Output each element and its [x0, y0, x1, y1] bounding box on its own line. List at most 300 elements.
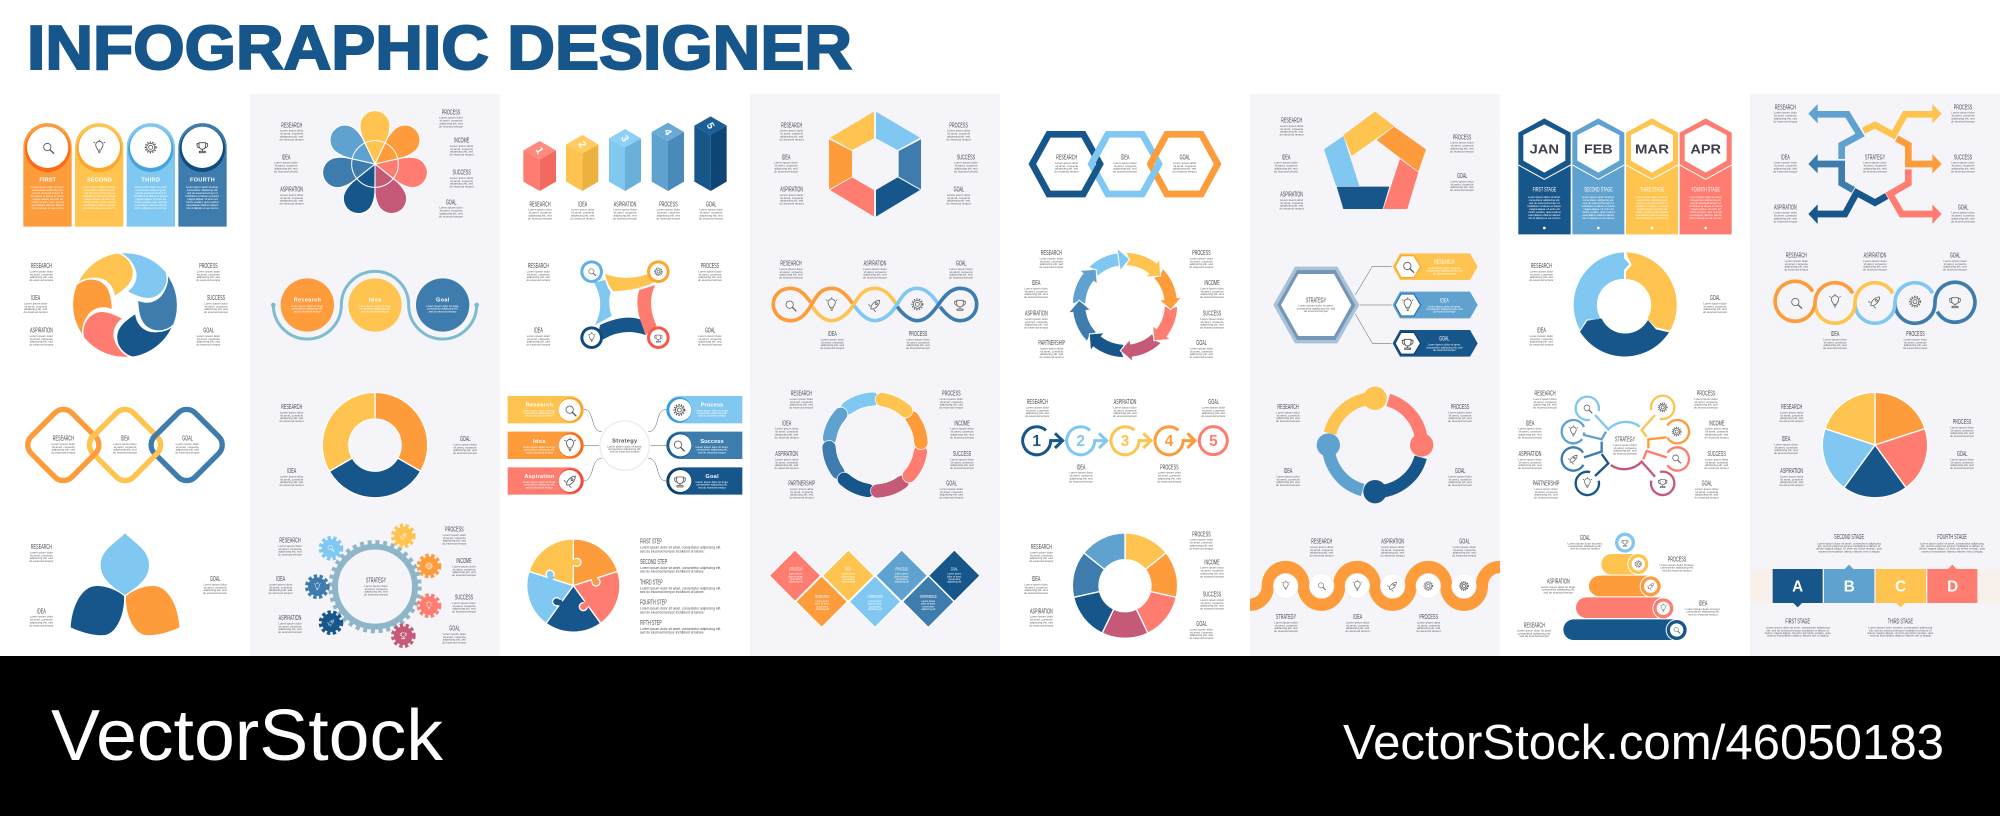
panel: segmented ring: Lorem ipsum dolor	[790, 487, 813, 491]
panel: strategy gears: do eiusmod tempor	[442, 542, 466, 546]
panel: hexagon ring: do eiusmod tempor	[947, 202, 971, 206]
panel: seven-part donut: RESEARCH	[1031, 544, 1052, 552]
panel: circular arrows: adipiscing elit, sed	[1040, 352, 1064, 356]
panel: A B C D stages: elit, sed do eiusmod tempor incididunt ut labore et	[1766, 628, 1829, 632]
panel: circular arrows: Lorem ipsum dolor	[1200, 317, 1224, 321]
panel: orange wave timeline: do eiusmod tempor	[1310, 554, 1334, 558]
panel: four tabs with icons: Lorem ipsum dolor sit amet,	[83, 185, 116, 189]
panel: month tabs: exercitation ullamco laboris	[1636, 213, 1669, 217]
panel: flower diagram: Lorem ipsum dolor	[274, 161, 298, 165]
panel: infinity chain: sit amet, consecte	[821, 340, 844, 344]
panel: numbered arrows: adipiscing elit, sed	[1026, 411, 1049, 415]
panel: strategy hub with eight branches: Lorem ipsum dolor	[1534, 487, 1558, 491]
panel: pentagon ring: GOAL	[1457, 173, 1468, 181]
panel: hexagon ring: Lorem ipsum dolor	[774, 161, 798, 165]
panel: circular arrows: Lorem ipsum dolor	[1040, 346, 1063, 350]
panel: hexagon ring: RESEARCH	[781, 122, 802, 130]
panel: numbered arrows: do eiusmod tempor	[1157, 479, 1181, 483]
panel: strategy hexagon with tags: STRATEGY	[1306, 297, 1326, 305]
panel: strategy hub with eight branches: sit amet, consecte	[1705, 460, 1728, 464]
panel: four-cornered ring	[526, 260, 722, 349]
panel: arrows from strategy hexagon: adipiscing elit, sed	[1951, 216, 1975, 220]
panel: strategy hub with eight branches: do eiusmod tempor	[1518, 466, 1542, 470]
panel: strategy hub with six tabs: Lorem ipsum dolor sit amet,	[696, 408, 729, 412]
panel: month tabs: magna aliqua. Ut enim ad	[1529, 207, 1560, 211]
panel: segmented ring: adipiscing elit, sed	[775, 463, 799, 467]
panel: seven-part donut: SUCCESS	[1203, 592, 1221, 599]
panel: four-cornered ring: do eiusmod tempor	[526, 343, 550, 347]
panel: hexagon ring: do eiusmod tempor	[774, 169, 798, 173]
panel: four-cornered ring: Lorem ipsum dolor	[698, 269, 722, 273]
panel: swirl diagram: sit amet, consecte	[205, 304, 228, 308]
panel: strategy hexagon with tags: Lorem ipsum dolor sit amet,	[1428, 343, 1461, 347]
panel: orange wave timeline: Lorem ipsum dolor	[1381, 545, 1404, 549]
panel: ring chain: do eiusmod tempor	[1903, 346, 1927, 350]
panel: strategy hub with eight branches: do eiusmod tempor	[1705, 435, 1729, 439]
panel: strategy hub with six tabs: sed do eiusmod tempor	[525, 450, 553, 454]
panel: segmented ring: RESEARCH	[791, 391, 812, 398]
panel: strategy gears: adipiscing elit, sed	[452, 607, 476, 611]
panel: seven-part donut: adipiscing elit, sed	[1200, 604, 1224, 608]
panel: swirl diagram: RESEARCH	[31, 263, 52, 271]
panel: four-cornered ring: GOAL	[705, 328, 716, 335]
panel: strategy hub with eight branches: adipiscing elit, sed	[1705, 432, 1729, 436]
panel: seven-part donut: sit amet, consecte	[1025, 585, 1048, 589]
panel: ring chain: adipiscing elit, sed	[1943, 265, 1967, 269]
panel: hexagon chain: Lorem ipsum dolor	[1173, 161, 1196, 165]
panel: strategy hub with six tabs: sed do eiusmod tempor	[610, 450, 639, 454]
panel: puzzle pie and steps: sed do eiusmod tempor incididunt ut labore.	[640, 631, 705, 635]
panel: stacked pyramid bars: Lorem ipsum dolor sit amet,	[1660, 563, 1695, 567]
panel: infinity chain: Lorem ipsum dolor	[949, 267, 973, 271]
panel: rounded diamond chain: Lorem ipsum dolor	[113, 442, 137, 446]
panel: three circles on a wave: sed do eiusmod tempor	[361, 309, 389, 313]
panel: four tabs with icons: sed do eiusmod tempor ut	[32, 191, 63, 195]
panel: four-cornered ring: Lorem ipsum dolor	[527, 269, 550, 273]
panel: ring chain: sit amet, consecte	[1944, 262, 1967, 266]
panel: strategy gears: sit amet, consecte	[279, 547, 302, 551]
panel: A B C D stages: Lorem ipsum dolor sit amet, consectetur adipiscing	[1920, 541, 1984, 545]
panel: interlocked diamonds: PROCESS	[896, 567, 908, 572]
panel: strategy hub with six tabs: sed do eiusmod tempor	[525, 414, 553, 418]
panel: three-part donut: IDEA	[287, 468, 296, 476]
panel: numbered arrows: adipiscing elit, sed	[1158, 476, 1181, 480]
panel: interlocked diamonds: consectetur	[842, 578, 855, 581]
panel: four tabs with icons: exercitation ullamco laboris	[135, 203, 167, 207]
panel: ring chain: sit amet, consecte	[1785, 262, 1808, 266]
panel: strategy hub with eight branches: Lorem ipsum dolor	[1518, 457, 1542, 461]
panel: interlocked diamonds: consectetur	[948, 578, 961, 581]
panel: ring with knobs: do eiusmod tempor	[1276, 483, 1300, 487]
panel: circular arrows: do eiusmod tempor	[1200, 295, 1224, 299]
panel: strategy gears: sit amet, consecte	[365, 587, 388, 591]
panel: seven-part donut: adipiscing elit, sed	[1190, 633, 1213, 637]
panel: A B C D stages: nostrud exercitation ullamco laboris nisi ut aliquip	[1767, 634, 1829, 638]
panel: swirl diagram: Lorem ipsum dolor	[24, 301, 47, 305]
panel: swirl diagram: Lorem ipsum dolor	[197, 269, 220, 273]
panel: five-part pie: do eiusmod tempor	[1950, 466, 1974, 470]
panel: swirl diagram: GOAL	[203, 328, 214, 335]
panel: strategy gears: GOAL	[449, 626, 460, 633]
panel: infinity chain: do eiusmod tempor	[779, 276, 803, 280]
panel: A B C D stages: elit, sed do eiusmod tempor incididunt ut labore et	[1869, 628, 1932, 632]
panel: segmented ring: sit amet, consecte	[775, 430, 798, 434]
panel: infinity chain: adipiscing elit, sed	[779, 273, 803, 277]
panel: isometric bars: sit amet, consecte	[657, 211, 680, 215]
panel: strategy hub with six tabs: Aspiration	[524, 474, 555, 480]
panel: three circles on a wave: sed do eiusmod tempor	[293, 309, 321, 313]
panel: seven-part donut: Lorem ipsum dolor	[1190, 627, 1213, 631]
panel: A B C D stages: dolore magna aliqua. Ut enim ad minim veniam, quis	[1919, 547, 1986, 551]
panel: swirl diagram: PROCESS	[199, 263, 218, 271]
panel: strategy hub with eight branches: do eiusmod tempor	[1533, 406, 1557, 410]
panel: strategy hub with eight branches: adipiscing elit, sed	[1694, 403, 1718, 407]
panel: infinity chain: Lorem ipsum dolor	[906, 337, 930, 341]
panel: ring with knobs: adipiscing elit, sed	[1448, 480, 1472, 484]
panel: isometric bars: 1	[533, 146, 545, 156]
panel: seven-part donut: sit amet, consecte	[1190, 630, 1213, 634]
panel: swirl diagram: adipiscing elit, sed	[24, 307, 48, 311]
panel: ring chain: PROCESS	[1906, 331, 1925, 339]
panel: isometric bars: adipiscing elit, sed	[699, 213, 723, 217]
panel: strategy hub with eight branches: do eiusmod tempor	[1534, 496, 1558, 500]
panel: ring chain: sit amet, consecte	[1864, 262, 1887, 266]
panel: segmented ring: Lorem ipsum dolor	[950, 427, 974, 431]
panel: strategy hub with six tabs: consectetur adipiscing elit,	[524, 411, 555, 415]
panel: five-part pie: sit amet, consecte	[1951, 428, 1974, 432]
panel: seven-part donut: do eiusmod tempor	[1024, 591, 1048, 595]
panel: interlocked diamonds: Lorem ipsum	[922, 600, 935, 603]
panel: strategy hexagon with tags: Lorem ipsum dolor sit amet,	[1299, 304, 1334, 308]
panel: arrows from strategy hexagon: adipiscing elit, sed	[1774, 216, 1797, 220]
panel: rounded diamond chain: sit amet, consecte	[114, 445, 137, 449]
panel: strategy gears: do eiusmod tempor	[269, 591, 293, 595]
panel: five-part pie: Lorem ipsum dolor	[1780, 474, 1803, 478]
panel: interlocked diamonds: adipiscing elit	[789, 581, 803, 584]
panel: three leaves: sit amet, consecte	[30, 618, 53, 622]
panel: isometric bars: do eiusmod tempor	[571, 216, 595, 220]
panel: rounded diamond chain: do eiusmod tempor	[175, 451, 199, 455]
panel: strategy hexagon with tags: GOAL	[1439, 336, 1449, 343]
panel: month tabs: exercitation ullamco laboris	[1528, 213, 1561, 217]
panel: strategy gears: adipiscing elit, sed	[452, 570, 476, 574]
panel: strategy gears: sit amet, consecte	[269, 585, 292, 589]
panel: puzzle pie and steps	[527, 539, 721, 635]
panel: interlocked diamonds: consectetur	[869, 605, 881, 608]
panel: month tabs: APR	[1690, 141, 1721, 156]
panel: A B C D stages: C	[1895, 578, 1906, 595]
panel: month tabs: incididunt ut labore et dolore	[1582, 204, 1616, 208]
panel: strategy gears: RESEARCH	[279, 538, 301, 545]
panel: flower diagram: sit amet, consecte	[275, 164, 298, 168]
panel: strategy hub with six tabs: Goal	[705, 474, 719, 480]
panel: stacked pyramid bars: PROCESS	[1668, 557, 1686, 564]
panel: circular arrows: sit amet, consecte	[1201, 320, 1224, 324]
panel: pentagon ring: Lorem ipsum dolor	[1280, 198, 1303, 202]
panel: interlocked diamonds: dolor sit amet,	[868, 603, 883, 606]
panel: circular arrows: RESEARCH	[1041, 250, 1062, 258]
panel: infinity chain: sit amet, consecte	[864, 270, 887, 274]
panel: arrows from strategy hexagon: SUCCESS	[1954, 154, 1972, 162]
panel: ring with knobs: adipiscing elit, sed	[1276, 480, 1300, 484]
panel: interlocked diamonds: Lorem ipsum	[895, 573, 908, 576]
panel: rounded diamond chain: Lorem ipsum dolor	[176, 442, 199, 446]
panel: isometric bars: do eiusmod tempor	[528, 216, 552, 220]
panel: strategy hub with six tabs: Research	[526, 402, 554, 408]
panel: seven-part donut: adipiscing elit, sed	[1030, 556, 1053, 560]
panel: three-part donut: GOAL	[460, 436, 471, 444]
panel: A B C D stages: nostrud exercitation ullamco laboris nisi ut aliquip	[1870, 634, 1931, 638]
panel: strategy gears: SUCCESS	[455, 595, 473, 602]
panel: four tabs with icons: minim veniam, quis nostrud	[186, 200, 219, 204]
panel: segmented ring: Lorem ipsum dolor	[775, 427, 798, 431]
panel: month tabs: magna aliqua. Ut enim ad	[1637, 207, 1668, 211]
panel: flower diagram: adipiscing elit, sed	[450, 150, 474, 154]
panel: arrows from strategy hexagon: adipiscing elit, sed	[1951, 116, 1975, 120]
panel: interlocked diamonds: RESEARCH	[815, 594, 830, 599]
panel: stacked pyramid bars: sed do eiusmod tempor	[1520, 634, 1549, 638]
panel: swirl diagram: sit amet, consecte	[197, 337, 220, 341]
panel: flower diagram: Lorem ipsum dolor	[450, 176, 473, 180]
panel: strategy hub with six tabs: sed do eiusmod tempor	[525, 485, 553, 489]
panel: arrows from strategy hexagon: sit amet, consecte	[1774, 214, 1797, 218]
panel: flower diagram: sit amet, consecte	[280, 196, 303, 200]
panel: ring with knobs: GOAL	[1455, 468, 1466, 476]
panel: five-part pie: Lorem ipsum dolor	[1774, 442, 1798, 446]
panel: three-part donut: Lorem ipsum dolor	[453, 442, 477, 446]
panel: flower diagram: sit amet, consecte	[280, 132, 303, 136]
panel: month tabs: nisi ut aliquip ex ea commo	[1582, 216, 1615, 220]
panel: four tabs with icons: THIRD	[141, 178, 160, 184]
panel: circular arrows: adipiscing elit, sed	[1025, 323, 1048, 327]
panel: seven-part donut: Lorem ipsum dolor	[1024, 582, 1048, 586]
panel: three leaves: GOAL	[210, 576, 221, 584]
panel: circular arrows: Lorem ipsum dolor	[1025, 317, 1048, 321]
panel: orange wave timeline: Lorem ipsum dolor	[1346, 620, 1369, 624]
panel: numbered arrows: adipiscing elit, sed	[1202, 411, 1225, 415]
panel: isometric bars: 3	[618, 134, 631, 144]
panel: strategy hub with eight branches: adipiscing elit, sed	[1533, 403, 1557, 407]
panel: five-part pie: adipiscing elit, sed	[1950, 463, 1974, 467]
panel: strategy hub with eight branches: Lorem ipsum dolor	[1705, 427, 1728, 431]
panel: three leaves: IDEA	[37, 608, 46, 616]
panel: segmented ring: sit amet, consecte	[940, 400, 963, 404]
panel: arrows from strategy hexagon: Lorem ipsum dolor	[1774, 161, 1797, 165]
panel: strategy hub with eight branches: Lorem ipsum dolor	[1533, 397, 1557, 401]
panel: pentagon ring: do eiusmod tempor	[1450, 188, 1474, 192]
panel: four tabs with icons: incididunt ut labore et dolore	[134, 194, 168, 198]
panel: hexagon chain: GOAL	[1180, 155, 1191, 162]
panel: four-cornered ring: sit amet, consecte	[699, 337, 722, 341]
panel: seven-part donut: Lorem ipsum dolor	[1190, 538, 1213, 542]
panel: flower diagram: adipiscing elit, sed	[280, 134, 304, 138]
upper row, columns three and four	[523, 112, 978, 350]
panel: four-cornered ring: Lorem ipsum dolor	[527, 334, 550, 338]
panel: orange wave timeline: ASPIRATION	[1381, 539, 1404, 546]
panel: month tabs: consectetur adipiscing elit,	[1690, 198, 1722, 202]
panel: strategy gears: sit amet, consecte	[443, 536, 466, 540]
panel: strategy hub with eight branches: IDEA	[1526, 420, 1535, 428]
panel: three leaves: Lorem ipsum dolor	[30, 615, 53, 619]
panel: three-part donut with notches: adipiscing elit, sed	[1530, 275, 1553, 279]
panel: ring with knobs: do eiusmod tempor	[1448, 419, 1472, 423]
panel: strategy hexagon with tags: Lorem ipsum dolor sit amet,	[1428, 266, 1461, 270]
panel: numbered arrows: sit amet, consecte	[1070, 474, 1093, 478]
panel: three leaves: do eiusmod tempor	[29, 623, 53, 627]
panel: four-cornered ring: PROCESS	[701, 263, 719, 271]
footer band	[0, 656, 2000, 816]
panel: swirl diagram: IDEA	[31, 295, 40, 303]
panel: strategy gears: Lorem ipsum dolor	[269, 582, 292, 586]
panel: flower diagram: Lorem ipsum dolor	[280, 129, 303, 133]
panel: seven-part donut: sit amet, consecte	[1030, 553, 1053, 557]
panel: three circles on a wave: sed do eiusmod tempor	[429, 309, 457, 313]
panel: five-part pie: GOAL	[1957, 451, 1968, 459]
panel: segmented ring: ASPIRATION	[775, 451, 798, 459]
panel: isometric bars: Lorem ipsum dolor	[571, 208, 594, 212]
panel: four-cornered ring: sit amet, consecte	[527, 337, 550, 341]
panel: pentagon ring: Lorem ipsum dolor	[1450, 179, 1474, 183]
panel: interlocked diamonds: adipiscing elit	[841, 581, 856, 584]
panel: four tabs with icons: minim veniam, quis nostrud	[31, 200, 64, 204]
panel: ring with knobs: adipiscing elit, sed	[1448, 416, 1472, 420]
panel: three leaves: Lorem ipsum dolor	[30, 550, 53, 554]
panel: seven-part donut: adipiscing elit, sed	[1190, 543, 1213, 547]
panel: puzzle pie and steps: FIRST STEP	[640, 539, 662, 546]
panel: ring chain: sit amet, consecte	[1824, 340, 1847, 344]
panel: A B C D stages: elit, sed do eiusmod tempor incididunt ut labore et	[1921, 544, 1983, 548]
panel: hexagon chain: Lorem ipsum dolor	[1113, 161, 1137, 165]
panel: circular arrows: Lorem ipsum dolor	[1040, 256, 1063, 260]
panel: five-part pie: adipiscing elit, sed	[1780, 480, 1804, 484]
panel: flower diagram	[274, 109, 474, 219]
panel: five-part pie: adipiscing elit, sed	[1950, 431, 1974, 435]
panel: ring with knobs: RESEARCH	[1277, 404, 1299, 412]
panel: five-part pie: sit amet, consecte	[1780, 477, 1803, 481]
panel: month tabs: Lorem ipsum dolor sit amet,	[1689, 195, 1722, 199]
panel: isometric bars: sit amet, consecte	[529, 211, 552, 215]
panel: orange wave timeline: sit amet, consecte	[1453, 548, 1476, 552]
panel: strategy hub with eight branches: adipiscing elit, sed	[1534, 493, 1558, 497]
panel: stacked pyramid bars: consectetur adipiscing elit,	[1518, 631, 1551, 635]
panel: A B C D stages: dolore magna aliqua. Ut enim ad minim veniam, quis	[1867, 631, 1934, 635]
panel: four tabs with icons: Lorem ipsum dolor sit amet,	[31, 185, 64, 189]
panel: ring chain: GOAL	[1950, 253, 1961, 260]
panel: circular arrows: adipiscing elit, sed	[1190, 352, 1213, 356]
panel: numbered arrows	[1023, 399, 1227, 483]
panel: month tabs: magna aliqua. Ut enim ad	[1583, 207, 1614, 211]
panel: month tabs: consectetur adipiscing elit,	[1636, 198, 1668, 202]
panel: isometric bars: sit amet, consecte	[571, 211, 594, 215]
panel: strategy hub with six tabs	[508, 396, 742, 495]
panel: strategy hub with six tabs: sed do eiusmod tempor	[698, 414, 726, 418]
panel: three-part donut with notches: do eiusmod tempor	[1529, 278, 1553, 282]
panel: hexagon ring: adipiscing elit, sed	[954, 166, 978, 170]
panel: arrows from strategy hexagon: Lorem ipsum dolor	[1951, 211, 1975, 215]
panel: numbered arrows: adipiscing elit, sed	[1069, 476, 1093, 480]
panel: swirl diagram: Lorem ipsum dolor	[204, 301, 228, 305]
panel: four tabs with icons: Lorem ipsum dolor sit amet,	[134, 185, 167, 189]
panel: ring chain: do eiusmod tempor	[1943, 268, 1967, 272]
panel: numbered arrows: sit amet, consecte	[1026, 408, 1049, 412]
panel: segmented ring: adipiscing elit, sed	[940, 493, 963, 497]
panel: four tabs with icons: minim veniam, quis nostrud	[83, 200, 116, 204]
panel: interlocked diamonds: Lorem ipsum	[789, 573, 802, 576]
panel: three leaves: Lorem ipsum dolor	[203, 582, 227, 586]
panel: three-part donut with notches: RESEARCH	[1531, 263, 1552, 271]
panel: puzzle pie and steps: Lorem ipsum dolor sit amet, consectetur adipiscing elit,	[640, 586, 721, 590]
panel: segmented ring: INCOME	[954, 420, 970, 428]
panel: seven-part donut: Lorem ipsum dolor	[1030, 550, 1053, 554]
panel: strategy gears: Lorem ipsum dolor	[452, 601, 476, 605]
panel: month tabs: Lorem ipsum dolor sit amet,	[1528, 195, 1561, 199]
panel: ring with knobs: Lorem ipsum dolor	[1448, 474, 1472, 478]
panel: circular arrows: sit amet, consecte	[1201, 289, 1224, 293]
panel: ring with knobs: Lorem ipsum dolor	[1448, 410, 1472, 414]
panel: strategy gears: do eiusmod tempor	[442, 641, 466, 645]
panel: isometric bars: 4	[661, 127, 674, 138]
panel: rounded diamond chain: sit amet, consecte	[52, 445, 75, 449]
panel: circular arrows: do eiusmod tempor	[1039, 265, 1063, 269]
panel: infinity chain: do eiusmod tempor	[906, 346, 930, 350]
panel: arrows from strategy hexagon: sit amet, consecte	[1952, 164, 1975, 168]
panel: infinity chain: adipiscing elit, sed	[906, 343, 930, 347]
panel: strategy hexagon with tags: RESEARCH	[1434, 259, 1455, 266]
panel: three-part donut: sit amet, consecte	[280, 413, 303, 417]
panel: isometric bars: do eiusmod tempor	[656, 216, 680, 220]
panel: interlocked diamonds: GOAL	[951, 567, 958, 572]
panel: month tabs: minim veniam, quis nostrud	[1582, 210, 1615, 214]
panel: hexagon ring: do eiusmod tempor	[780, 137, 804, 141]
panel: segmented ring: do eiusmod tempor	[789, 406, 813, 410]
panel: arrows from strategy hexagon: Lorem ipsum dolor	[1774, 111, 1797, 115]
panel: infinity chain: sit amet, consecte	[950, 270, 973, 274]
panel: rounded diamond chain	[23, 404, 227, 486]
panel: segmented ring: IDEA	[782, 420, 791, 428]
panel: four tabs with icons: magna aliqua. Ut enim ad	[187, 197, 218, 201]
panel: strategy hub with eight branches: SUCCESS	[1707, 451, 1726, 459]
panel: five-part pie: RESEARCH	[1781, 404, 1802, 412]
panel: strategy hub with eight branches: ASPIRATION	[1519, 451, 1541, 459]
panel: segmented ring: sit amet, consecte	[951, 460, 974, 464]
panel: three-part donut with notches: IDEA	[1537, 328, 1546, 335]
panel: puzzle pie and steps: Lorem ipsum dolor sit amet, consectetur adipiscing elit,	[640, 627, 721, 631]
panel: three-part donut with notches: GOAL	[1710, 295, 1721, 303]
panel: A B C D stages: SECOND STAGE	[1834, 534, 1864, 542]
panel: interlocked diamonds: adipiscing elit	[815, 608, 830, 611]
panel: ring with knobs: sit amet, consecte	[1277, 413, 1300, 417]
panel: swirl diagram: sit amet, consecte	[197, 272, 220, 276]
panel: numbered arrows: PROCESS	[1160, 464, 1179, 472]
panel: numbered arrows: Lorem ipsum dolor	[1113, 405, 1137, 409]
panel: interlocked diamonds: ASPIRATION	[867, 594, 883, 599]
panel: strategy hub with six tabs: sed do eiusmod tempor	[698, 450, 726, 454]
panel: A B C D stages: D	[1947, 578, 1958, 595]
panel: strategy hub with eight branches: STRATEGY	[1615, 437, 1635, 444]
panel: arrows from strategy hexagon: Lorem ipsum dolor	[1951, 161, 1975, 165]
panel: flower diagram: Lorem ipsum dolor	[439, 116, 463, 120]
panel: orange wave timeline: sit amet, consecte	[1346, 623, 1369, 627]
panel: seven-part donut: sit amet, consecte	[1201, 601, 1224, 605]
panel: hexagon ring: adipiscing elit, sed	[780, 134, 804, 138]
panel: three circles on a wave	[271, 271, 479, 339]
panel: hexagon ring: adipiscing elit, sed	[947, 134, 971, 138]
panel: flower diagram: Lorem ipsum dolor	[439, 206, 463, 210]
panel: three-part donut with notches: Lorem ipsum dolor	[1530, 334, 1553, 338]
panel: strategy hub with eight branches: sit amet, consecte	[1519, 430, 1542, 434]
panel: five-part pie: sit amet, consecte	[1775, 445, 1798, 449]
panel: segmented ring: do eiusmod tempor	[950, 435, 974, 439]
